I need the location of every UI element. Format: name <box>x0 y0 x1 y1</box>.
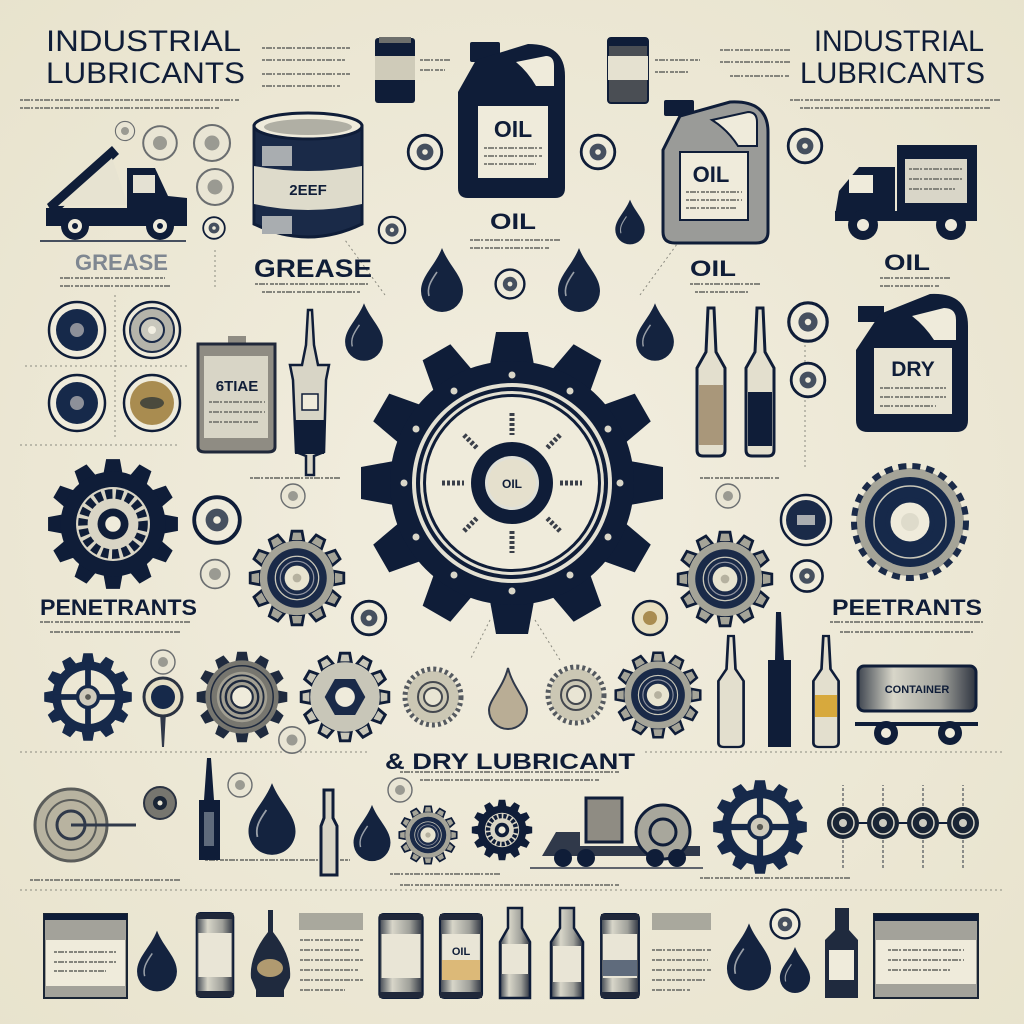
icon: small can left <box>375 37 415 103</box>
title: left: LUBRICANTS <box>46 57 245 90</box>
icon: oil drops <box>345 200 674 361</box>
icon: grey oil jug <box>663 100 768 243</box>
title: right <box>800 25 985 90</box>
icon: grease can <box>198 336 275 452</box>
row of gears <box>44 652 700 747</box>
icon: cross wheel <box>713 780 807 874</box>
heading: grease: GREASE <box>254 255 372 283</box>
icon: grease drum: 2EEF <box>289 182 327 199</box>
icon: four discs <box>827 785 979 870</box>
bottom product row: OIL <box>452 946 470 958</box>
icon: dump truck left <box>40 146 187 241</box>
icon: grease can: 6TIAE <box>216 378 258 395</box>
gear: right medium <box>678 532 772 626</box>
icon: black oil jug <box>458 42 565 198</box>
heading: oil right: OIL <box>690 256 736 281</box>
gear: left large <box>48 459 178 589</box>
title: right: INDUSTRIAL <box>814 25 984 58</box>
small icons around the central gear <box>115 121 831 950</box>
icon: tank trailer <box>855 666 978 745</box>
icon: slim tubes <box>718 612 839 747</box>
icon: locomotive <box>530 798 703 868</box>
icon: dry lubricant jug <box>856 294 968 432</box>
icon: oil tubes <box>697 308 774 456</box>
heading: oil far right: OIL <box>884 250 930 275</box>
central gear <box>361 332 663 634</box>
icon: dry lubricant jug: DRY <box>891 358 935 381</box>
icon: grease drum <box>254 113 362 237</box>
icon: black oil jug: OIL <box>494 116 532 142</box>
heading: dry lubricant: & DRY LUBRICANT <box>385 749 636 774</box>
heading: oil center: OIL <box>490 209 536 234</box>
icon: amber oil drop <box>489 668 527 729</box>
lower icon row <box>35 758 532 875</box>
title: left: INDUSTRIAL <box>46 25 241 58</box>
icon: bearing discs <box>49 302 180 431</box>
heading: penetrants right: PEETRANTS <box>832 595 982 620</box>
icon: grey oil jug: OIL <box>693 162 729 187</box>
heading: faded grease: GREASE <box>75 250 168 275</box>
icon: tank trailer: CONTAINER <box>885 684 949 696</box>
gear: left medium <box>250 531 344 625</box>
title: left <box>46 25 245 90</box>
gear: right large <box>854 466 966 578</box>
central gear: OIL <box>502 477 522 491</box>
bottom product row <box>44 908 978 998</box>
icon: syringe <box>290 310 329 475</box>
title: right: LUBRICANTS <box>800 57 985 90</box>
heading: penetrants left: PENETRANTS <box>40 595 197 620</box>
icon: delivery truck right <box>835 145 977 240</box>
icon: small can right <box>608 38 648 103</box>
